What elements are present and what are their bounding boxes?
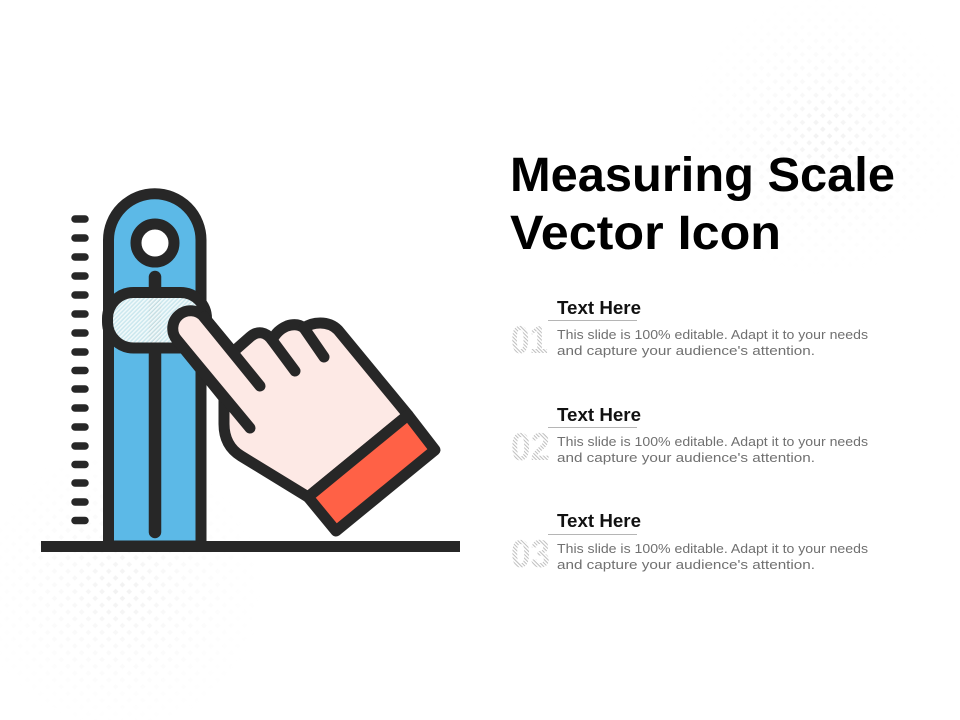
body 03: This slide is 100% editable. Adapt it to your needs (557, 542, 868, 556)
finger lines (177, 317, 324, 428)
title (510, 149, 895, 260)
slider (108, 292, 206, 348)
scale centre rod (149, 277, 161, 532)
heading 03: Text Here (557, 511, 641, 531)
base line (41, 541, 460, 552)
cuff (308, 415, 435, 531)
number 02: 02 (511, 426, 550, 469)
body 03: and capture your audience's attention. (557, 558, 815, 572)
body 03 (557, 542, 868, 572)
scale tick marks (75, 219, 85, 520)
title: Vector Icon (510, 207, 781, 260)
body 01 (557, 328, 868, 358)
body 02 (557, 435, 868, 465)
body 02: This slide is 100% editable. Adapt it to your needs (557, 435, 868, 449)
scale hole (136, 224, 174, 262)
body 02: and capture your audience's attention. (557, 451, 815, 465)
halftone background: bottom left (83, 556, 156, 626)
hand (173, 311, 408, 497)
body 01: and capture your audience's attention. (557, 344, 815, 358)
number 01: 01 (511, 319, 548, 362)
halftone background: top right (788, 100, 859, 170)
body 01: This slide is 100% editable. Adapt it to your needs (557, 328, 868, 342)
item 02 (511, 405, 868, 469)
title: Measuring Scale (510, 149, 895, 202)
number 03: 03 (511, 533, 550, 576)
icon: measuring scale with pointing hand (41, 194, 460, 552)
item 03 (511, 511, 868, 576)
heading 02: Text Here (557, 405, 641, 425)
item 01 (511, 298, 868, 362)
scale body (108, 194, 201, 546)
heading 01: Text Here (557, 298, 641, 318)
